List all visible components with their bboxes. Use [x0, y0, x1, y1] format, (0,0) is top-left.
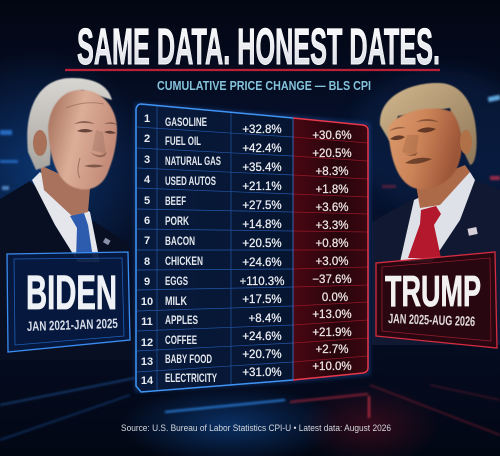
portrait: Trump — [372, 83, 500, 345]
panel: Biden label — [7, 252, 130, 352]
facial features — [389, 119, 439, 164]
Biden values: +35.4% — [242, 162, 282, 174]
Biden values: +32.8% — [242, 124, 282, 136]
item names: COFFEE — [165, 335, 197, 347]
subtitle: CUMULATIVE PRICE CHANGE — BLS CPI — [157, 78, 371, 93]
Biden values: +14.8% — [242, 219, 282, 231]
Biden values: +27.5% — [242, 200, 282, 212]
item names: NATURAL GAS — [165, 156, 221, 168]
item names: GASOLINE — [165, 117, 207, 129]
name: BIDEN — [26, 267, 117, 320]
row numbers: 9 — [144, 276, 150, 288]
Biden values — [240, 124, 284, 379]
Biden values: +42.4% — [242, 143, 282, 155]
Trump values: +13.0% — [312, 309, 352, 321]
item names: BACON — [165, 236, 195, 248]
Biden column panel — [137, 105, 293, 393]
tie — [70, 213, 93, 258]
Trump values: +3.6% — [316, 202, 348, 214]
Trump values: +1.8% — [316, 184, 348, 196]
Trump column panel — [293, 118, 368, 380]
item names: FUEL OIL — [165, 136, 201, 148]
data table — [136, 104, 368, 393]
hair — [27, 78, 112, 170]
flag pin — [103, 238, 111, 245]
ear — [460, 130, 472, 154]
Trump values — [312, 130, 352, 373]
table glow — [137, 105, 368, 390]
tie — [408, 206, 441, 258]
item names: PORK — [165, 216, 189, 228]
facial features — [66, 103, 118, 178]
row numbers: 12 — [141, 337, 153, 349]
row numbers: 6 — [144, 215, 150, 227]
row numbers: 1 — [144, 113, 150, 125]
Trump values: +21.9% — [312, 327, 352, 339]
row numbers: 7 — [144, 235, 150, 247]
Biden values: +8.4% — [249, 313, 281, 325]
suit — [372, 178, 500, 345]
row numbers: 3 — [144, 154, 150, 166]
item names: CHICKEN — [165, 256, 203, 268]
item names: EGGS — [165, 276, 188, 288]
row numbers: 2 — [144, 133, 150, 145]
source note: Source: U.S. Bureau of Labor Statistics CPI-U • Latest data: August 2026 — [121, 423, 391, 433]
row numbers: 5 — [144, 195, 150, 207]
shirt — [32, 172, 100, 262]
flag pin — [467, 227, 478, 236]
Trump values: +2.7% — [316, 344, 348, 356]
table borders — [136, 104, 293, 392]
row numbers: 13 — [141, 356, 153, 368]
face — [388, 109, 462, 189]
item names: APPLES — [165, 315, 198, 327]
item names — [165, 117, 221, 385]
dates: JAN 2021-JAN 2025 — [27, 316, 118, 334]
Trump values: +3.0% — [316, 256, 348, 268]
Trump values: +10.0% — [312, 361, 352, 373]
hair — [380, 83, 477, 165]
Biden values: +24.6% — [242, 331, 282, 343]
neck — [40, 165, 90, 216]
portrait: Biden — [0, 78, 133, 360]
item names: MILK — [165, 296, 188, 308]
suit — [0, 181, 133, 360]
ear — [33, 130, 47, 156]
Biden values: +24.6% — [242, 257, 282, 269]
shirt — [400, 172, 475, 262]
title underline — [65, 69, 440, 71]
Trump values: 0.0% — [322, 292, 348, 304]
item names: BABY FOOD — [165, 354, 212, 366]
Biden values: +110.3% — [240, 276, 284, 288]
neck — [416, 165, 470, 208]
item names: USED AUTOS — [165, 176, 216, 188]
Trump values: +20.5% — [312, 148, 352, 160]
Trump values: +0.8% — [316, 238, 348, 250]
row numbers — [141, 113, 154, 387]
Trump values: +8.3% — [316, 166, 348, 178]
panel: Trump label — [376, 252, 497, 348]
Biden values: +31.0% — [242, 367, 282, 379]
Biden values: +20.7% — [242, 349, 282, 361]
item names: ELECTRICITY — [165, 373, 217, 385]
Trump values: −37.6% — [312, 274, 352, 286]
row numbers: 10 — [141, 296, 153, 308]
row numbers: 8 — [144, 256, 150, 268]
row lines — [137, 106, 368, 391]
Trump values: +3.3% — [316, 220, 348, 232]
row numbers: 14 — [141, 375, 154, 387]
Biden values: +20.5% — [242, 238, 282, 250]
Biden values: +21.1% — [242, 181, 282, 193]
row numbers: 4 — [144, 174, 151, 186]
Biden values: +17.5% — [242, 294, 282, 306]
item names: BEEF — [165, 196, 186, 208]
Trump values: +30.6% — [312, 130, 352, 142]
face — [48, 90, 117, 189]
row numbers: 11 — [141, 316, 153, 328]
